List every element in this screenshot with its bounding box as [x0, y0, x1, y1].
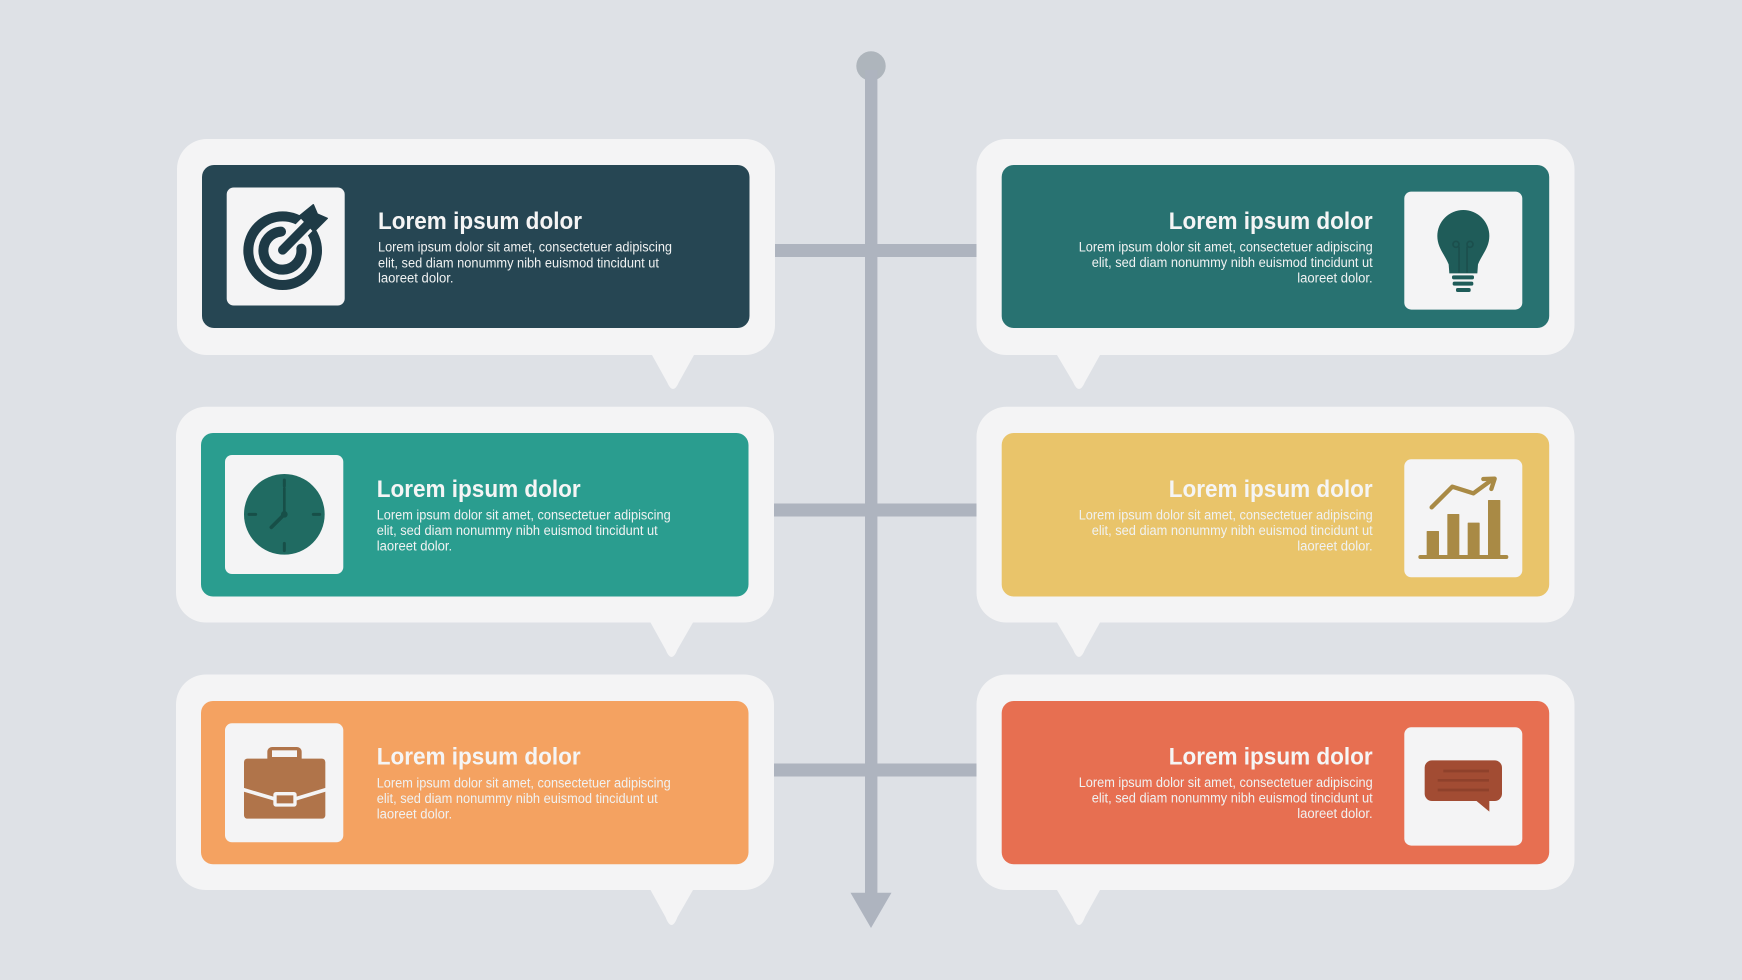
icon tile: [1404, 727, 1522, 846]
body text: Lorem ipsum dolor sit amet, consectetuer adipiscing: [377, 508, 671, 522]
card colour fill: [1002, 701, 1549, 864]
body text: Lorem ipsum dolor sit amet, consectetuer adipiscing: [377, 775, 671, 790]
body text: elit, sed diam nonummy nibh euismod tincidunt ut: [1092, 791, 1373, 806]
body text: [377, 775, 671, 821]
body text: laoreet dolor.: [1297, 270, 1373, 286]
card colour fill: [202, 165, 750, 328]
panel: briefcase: [176, 674, 774, 925]
body text: laoreet dolor.: [378, 271, 454, 286]
heading: Lorem ipsum dolor: [1169, 744, 1373, 771]
body text: Lorem ipsum dolor sit amet, consectetuer adipiscing: [1079, 775, 1373, 790]
panel: clock: [176, 407, 774, 657]
body text: [377, 508, 671, 554]
body text: [1079, 507, 1373, 553]
card frame with pointer: [176, 407, 774, 657]
body text: Lorem ipsum dolor sit amet, consectetuer adipiscing: [378, 240, 672, 255]
body text: laoreet dolor.: [1297, 806, 1373, 821]
card colour fill: [1002, 165, 1549, 328]
icon: briefcase: [243, 747, 326, 819]
icon tile: [227, 188, 345, 306]
panel: growth chart: [976, 407, 1574, 657]
card frame with pointer: [976, 407, 1574, 657]
panel: speech bubble: [976, 674, 1574, 925]
icon: growth chart: [1418, 479, 1508, 559]
icon tile: [225, 455, 343, 574]
card frame with pointer: [976, 674, 1574, 925]
icon: clock: [244, 474, 325, 555]
panel: target: [177, 139, 775, 389]
icon: speech bubble: [1425, 760, 1502, 812]
icon: target with arrow: [248, 205, 327, 285]
card colour fill: [201, 701, 748, 864]
panel: lightbulb: [976, 139, 1574, 389]
body text: elit, sed diam nonummy nibh euismod tincidunt ut: [378, 255, 659, 270]
body text: Lorem ipsum dolor sit amet, consectetuer adipiscing: [1079, 507, 1373, 522]
connector lines: [770, 244, 980, 776]
heading: Lorem ipsum dolor: [378, 208, 582, 235]
card colour fill: [201, 433, 748, 596]
icon tile: [1404, 459, 1522, 577]
body text: laoreet dolor.: [377, 806, 452, 821]
central timeline arrow: [850, 51, 892, 928]
body text: elit, sed diam nonummy nibh euismod tincidunt ut: [377, 791, 658, 806]
body text: elit, sed diam nonummy nibh euismod tincidunt ut: [1092, 523, 1373, 538]
icon tile: [1404, 192, 1522, 310]
heading: Lorem ipsum dolor: [1169, 476, 1373, 503]
body text: laoreet dolor.: [377, 538, 452, 554]
body text: elit, sed diam nonummy nibh euismod tincidunt ut: [1092, 255, 1373, 270]
card frame with pointer: [976, 139, 1574, 389]
icon tile: [225, 723, 343, 842]
body text: [1079, 775, 1373, 821]
card frame with pointer: [177, 139, 775, 389]
body text: laoreet dolor.: [1297, 538, 1373, 553]
body text: Lorem ipsum dolor sit amet, consectetuer adipiscing: [1079, 240, 1373, 254]
body text: [378, 240, 672, 286]
card colour fill: [1002, 433, 1549, 596]
body text: [1079, 240, 1373, 286]
heading: Lorem ipsum dolor: [377, 476, 581, 503]
icon: lightbulb: [1437, 210, 1489, 292]
heading: Lorem ipsum dolor: [1169, 208, 1373, 235]
card frame with pointer: [176, 674, 774, 925]
heading: Lorem ipsum dolor: [377, 744, 581, 771]
body text: elit, sed diam nonummy nibh euismod tincidunt ut: [377, 523, 658, 538]
